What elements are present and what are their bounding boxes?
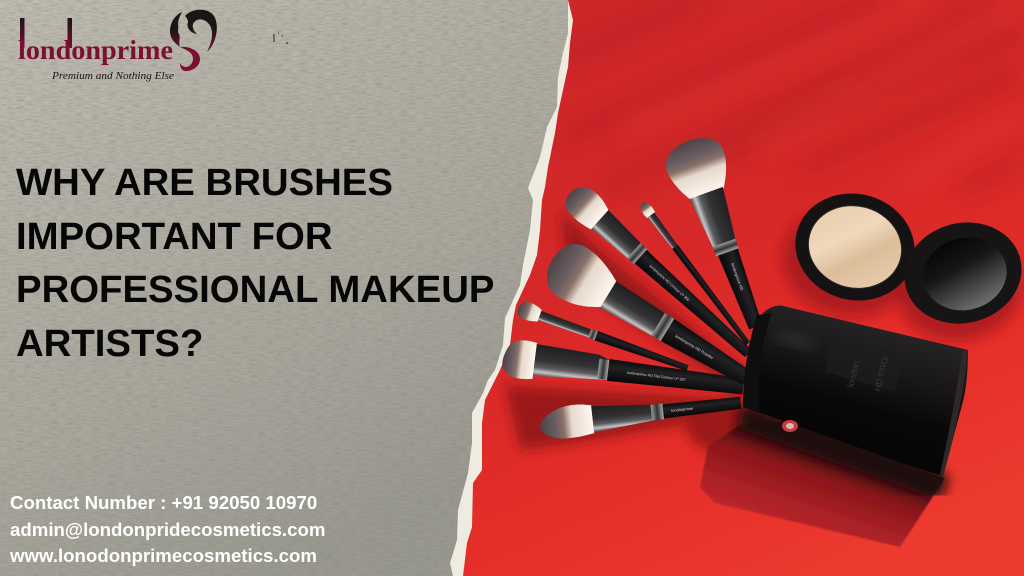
brushes fan: [501, 131, 784, 441]
headline: PROFESSIONAL MAKEUP: [16, 268, 494, 311]
brush: small eye blender: [516, 300, 691, 376]
contact details: admin@londonpridecosmetics.com: [10, 519, 325, 540]
brush: flat foundation (bottom): [538, 387, 743, 441]
leather brush cup: [743, 305, 968, 476]
brush: large top powder: [660, 131, 784, 337]
brush: small detail: [638, 200, 752, 347]
logo wordmark: [18, 18, 173, 65]
headline: WHY ARE BRUSHES: [16, 161, 393, 204]
logo: [18, 10, 217, 82]
leather brush cup: HD PRO: [872, 356, 890, 392]
contact details: [9, 492, 325, 566]
brush: medium contour: londonprime HD Contour LP 356: [649, 264, 690, 302]
logo hair and face icon: [170, 10, 217, 71]
leather brush cup: london: [845, 360, 861, 388]
headline: IMPORTANT FOR: [16, 215, 333, 258]
grey paper panel: [0, 0, 570, 576]
brush: large top powder: londonprime HD: [730, 262, 745, 291]
contact details: Contact Number : +91 92050 10970: [10, 492, 317, 513]
brush: flat foundation (bottom): londonprime: [671, 406, 694, 413]
logo wordmark: londonprime: [18, 35, 173, 65]
brush: medium contour: [559, 180, 760, 365]
brush: large powder: londonprime HD Powder: [674, 333, 715, 361]
contact details: www.lonodonprimecosmetics.com: [9, 545, 317, 566]
logo tagline: Premium and Nothing Else: [51, 71, 174, 82]
compact mirror: [894, 210, 1024, 336]
cast shadows: [505, 195, 1024, 547]
headline: [16, 161, 494, 365]
brush: flat contour: [501, 338, 746, 406]
compact powder: [783, 180, 927, 314]
cup snap button: [782, 420, 798, 432]
headline: ARTISTS?: [16, 322, 203, 365]
torn white paper edge: [0, 0, 573, 576]
brush: flat contour: londonprime HD Flat Contour LP 357: [627, 371, 686, 382]
brush: large powder: [537, 236, 762, 402]
red backdrop: [440, 0, 1024, 576]
